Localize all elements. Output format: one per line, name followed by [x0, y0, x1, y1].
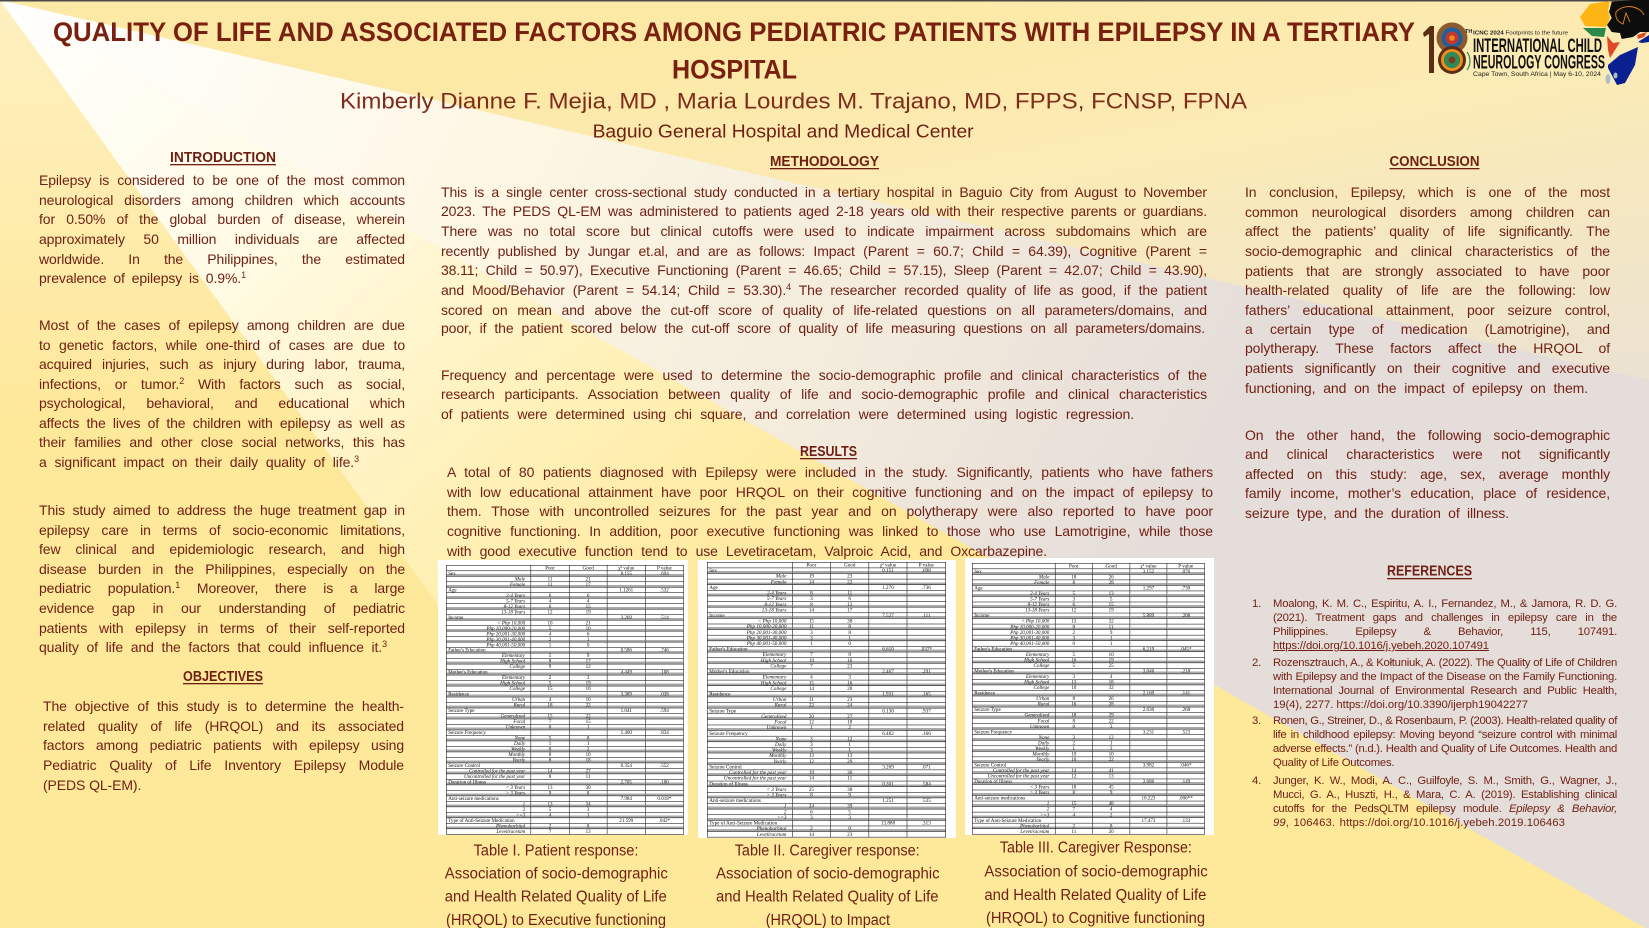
text: introduction paragraph 2: infections, or tumor.2 With factors such as social, [39, 376, 405, 392]
references list: Mucci, G. A., Huszti, H., & Mara, C. A. (2019). Establishing clinical [1273, 789, 1617, 801]
text: introduction paragraph 2: their families and other close social networks, this has [39, 434, 405, 450]
text: introduction paragraph 3: epilepsy care in terms of socio-economic limitations, [39, 522, 405, 538]
references list: https://doi.org/10.1016/j.yebeh.2020.107491 [1273, 640, 1489, 652]
references list [1252, 598, 1618, 829]
references list: 2. [1252, 657, 1261, 669]
heading: introduction: INTRODUCTION [170, 150, 276, 166]
text: introduction paragraph 1: for 0.50% of the global burden of disease, wherein [39, 211, 405, 227]
text: introduction paragraph 1: worldwide. In the Philippines, the estimated [39, 251, 405, 267]
text: methodology paragraph 1: and Mood/Behavior (Parent = 54.14; Child = 53.30).4 The researcher recorded quality of life as good, if the patient [441, 282, 1207, 298]
text: introduction paragraph 3: few clinical and epidemiologic research, and high [39, 541, 405, 557]
text: results: cognitive functioning. In addition, poor executive functioning was linked to those who use Lamotrigine, while those [447, 523, 1213, 539]
text: conclusion paragraph 1: socio-demographic and clinical characteristics of the [1245, 243, 1610, 259]
text: methodology paragraph 1: There was no total score but clinical cutoffs were used to indicate impairment across subdomains which are [441, 223, 1207, 239]
text: introduction paragraph 3 [39, 502, 405, 655]
text: conclusion paragraph 1: common neurological disorders among children can [1245, 204, 1610, 220]
references list: Quality of Life Outcomes. [1273, 757, 1394, 769]
text: conclusion paragraph 1 [1245, 184, 1610, 396]
text: methodology paragraph 1: 38.11; Child = 50.97), Executive Functioning (Parent = 46.65; Child = 57.15), Sleep (Parent = 42.07; Child = 43.90), [441, 262, 1207, 278]
text: methodology paragraph 2: research participants. Association between quality of life and socio-demographic profile and clinical characteristics [441, 386, 1207, 402]
text: conclusion paragraph 1: functioning, and on the impact of epilepsy on them. [1245, 380, 1588, 396]
text: methodology paragraph 1: recently published by Jungar et.al, and are as follows: Impact (Parent = 60.7; Child = 64.39), Cognitive (Parent = [441, 243, 1207, 259]
references list: Junger, K. W., Modi, A. C., Guilfoyle, S. M., Smith, G., Wagner, J., [1273, 775, 1617, 787]
text: introduction paragraph 2: psychological, behavioral, and educational which [39, 395, 405, 411]
caption: table I: Table I. Patient response: [474, 843, 638, 860]
text: conclusion paragraph 2: and clinical characteristics were not significantly [1245, 446, 1610, 462]
logo: International Child Neurology Congress [1423, 0, 1649, 85]
text: results: A total of 80 patients diagnosed with Epilepsy were included in the study. Significantly, patients who have fathers [447, 464, 1213, 480]
text: conclusion paragraph 1: patients that are strongly associated to have poor [1245, 263, 1610, 279]
text: introduction paragraph 1: approximately 50 million individuals are affected [39, 231, 405, 247]
text: methodology paragraph 1: This is a single center cross-sectional study conducted in a tertiary hospital in Baguio City from August to November [441, 184, 1207, 200]
references list: 19(4), 2277. https://doi.org/10.3390/ijerph19042277 [1273, 699, 1528, 711]
logo: International Child Neurology Congress: Cape Town, South Africa | May 6-10, 2024 [1473, 72, 1602, 78]
text: introduction paragraph 1: neurological disorders among children which accounts [39, 192, 405, 208]
text: objectives [43, 698, 404, 793]
text: introduction paragraph 3: This study aimed to address the huge treatment gap in [39, 502, 405, 518]
text: introduction paragraph 3: pediatric population.1 Moreover, there is a large [39, 580, 405, 596]
text: results: with good executive function tend to use Levetiracetam, Valproic Acid, and Oxcarbazepine. [447, 543, 1047, 559]
text: conclusion paragraph 2: On the other hand, the following socio-demographic [1245, 427, 1610, 443]
text: introduction paragraph 3: evidence gap in our understanding of pediatric [39, 600, 405, 616]
references list: Rozensztrauch, A., & Kołtuniuk, A. (2022). The Quality of Life of Children [1273, 657, 1617, 669]
references list: 1. [1252, 598, 1261, 610]
references list: Ronen, G., Streiner, D., & Rosenbaum, P. (2003). Health-related quality of [1273, 715, 1617, 727]
authors: Kimberly Dianne F. Mejia, MD , Maria Lourdes M. Trajano, MD, FPPS, FCNSP, FPNA [340, 89, 1247, 114]
text: introduction paragraph 2: a significant impact on their daily quality of life.3 [39, 454, 359, 470]
caption: table II [716, 843, 940, 928]
caption: table I: Association of socio-demographic [445, 866, 668, 883]
caption: table III: and Health Related Quality of Life [984, 887, 1206, 904]
logo: International Child Neurology Congress: ICNC 2024 Footprints to the future [1473, 30, 1568, 36]
references list: Moalong, K. M. C., Espiritu, A. I., Fernandez, M., & Jamora, R. D. G. [1273, 598, 1617, 610]
caption: table III: (HRQOL) to Cognitive functioning [986, 910, 1205, 927]
heading: conclusion: CONCLUSION [1390, 154, 1480, 170]
text: conclusion paragraph 1: fathers’ educational attainment, poor seizure control, [1245, 302, 1610, 318]
text: introduction paragraph 3: patients with epilepsy in terms of their self-reported [39, 620, 405, 636]
caption: table II: Table II. Caregiver response: [735, 843, 920, 860]
text: methodology paragraph 1: poor, if the patient scored below the cut-off score of quality of life measuring questions on all parameters/domains. [441, 320, 1205, 336]
caption: table III: Association of socio-demographic [984, 864, 1208, 881]
text: introduction paragraph 2: Most of the cases of epilepsy among children are due [39, 317, 405, 333]
references list: 3. [1252, 715, 1261, 727]
text: introduction paragraph 1: Epilepsy is considered to be one of the most common [39, 172, 405, 188]
text: conclusion paragraph 2: family income, mother’s education, place of residence, [1245, 485, 1610, 501]
logo: International Child Neurology Congress: TH [1465, 29, 1472, 35]
text: methodology paragraph 2: Frequency and percentage were used to determine the socio-demographic profile and clinical characteristics of the [441, 367, 1207, 383]
caption: table I [444, 843, 668, 928]
text: conclusion paragraph 1: In conclusion, Epilepsy, which is one of the most [1245, 184, 1610, 200]
text: conclusion paragraph 2: seizure type, and the duration of illness. [1245, 505, 1509, 521]
text: methodology paragraph 1: 2023. The PEDS QL-EM was administered to patients aged 2-18 years old with their respective parents or guardians. [441, 203, 1207, 219]
caption: table I: and Health Related Quality of Life [445, 889, 667, 906]
text: objectives: (PEDS QL-EM). [43, 777, 141, 793]
text: introduction paragraph 2: affects the lives of the children with epilepsy as well as [39, 415, 405, 431]
text: results: them. Those with uncontrolled seizures for the past year and on polytherapy were also reported to have poor [447, 503, 1213, 519]
references list: adverse effects.” (n.d.). Health and Quality of Life Outcomes. Health and [1273, 743, 1617, 755]
caption: table II: and Health Related Quality of Life [716, 889, 938, 906]
text: introduction paragraph 1: prevalence of epilepsy is 0.9%.1 [39, 270, 246, 286]
text: conclusion paragraph 1: a certain type of medication (Lamotrigine), and [1245, 321, 1610, 337]
text: methodology paragraph 1 [441, 184, 1208, 336]
references list: (2021). Treatment gaps and challenges in epilepsy care in the [1273, 612, 1617, 624]
text: introduction paragraph 1 [39, 172, 405, 286]
text: conclusion paragraph 1: polytherapy. These factors affect the HRQOL of [1245, 340, 1610, 356]
text: conclusion paragraph 1: health-related quality of life are the following: low [1245, 282, 1610, 298]
text: introduction paragraph 3: disease burden in the Philippines, especially on the [39, 561, 405, 577]
heading: methodology: METHODOLOGY [770, 154, 879, 170]
title: HOSPITAL [672, 55, 797, 85]
caption: table II: Association of socio-demographic [716, 866, 940, 883]
references list: with Epilepsy and the Impact of the Disease on the Family Functioning. [1273, 671, 1617, 683]
text: conclusion paragraph 1: patients significantly on their cognitive and executive [1245, 360, 1610, 376]
caption: table III [984, 840, 1208, 927]
affiliation: Baguio General Hospital and Medical Center [593, 120, 974, 142]
references list: International Journal of Environmental Research and Public Health, [1273, 685, 1617, 697]
table I: patient response [438, 560, 688, 835]
references list: life in childhood epilepsy: Moving beyond “seizure control with minimal [1273, 729, 1617, 741]
references list: Philippines. Epilepsy & Behavior, 115, 107491. [1273, 626, 1617, 638]
text: methodology paragraph 2 [441, 367, 1207, 422]
text: introduction paragraph 3: quality of life and the factors that could influence it.3 [39, 639, 387, 655]
text: objectives: The objective of this study is to determine the health- [43, 698, 404, 714]
text: results [447, 464, 1213, 559]
text: conclusion paragraph 2 [1245, 427, 1610, 521]
references list: 4. [1252, 775, 1261, 787]
text: objectives: related quality of life (HRQOL) and its associated [43, 718, 404, 734]
table III: caregiver response [965, 558, 1214, 835]
text: methodology paragraph 2: of patients were determined using chi square, and correlation were determined using logistic regression. [441, 406, 1134, 422]
text: introduction paragraph 2: to genetic factors, while one-third of cases are due to [39, 337, 405, 353]
text: objectives: factors among pediatric patients with epilepsy using [43, 737, 404, 753]
text: conclusion paragraph 2: affected on this study: age, sex, average monthly [1245, 466, 1610, 482]
title: QUALITY OF LIFE AND ASSOCIATED FACTORS AMONG PEDIATRIC PATIENTS WITH EPILEPSY IN A TERTIARY [53, 17, 1415, 47]
references list: cutoffs for the PedsQLTM epilepsy module. Epilepsy & Behavior, [1273, 803, 1617, 815]
caption: table III: Table III. Caregiver Response: [1000, 840, 1192, 857]
references list: 99, 106463. https://doi.org/10.1016/j.yebeh.2019.106463 [1273, 817, 1565, 829]
text: introduction paragraph 2: acquired injuries, such as injury during labor, trauma, [39, 356, 405, 372]
table II: caregiver response [698, 560, 956, 838]
text: objectives: Pediatric Quality of Life Inventory Epilepsy Module [43, 757, 404, 773]
text: methodology paragraph 1: scored on mean and above the cut-off score of quality of life-related questions on all parameters/domains, and [441, 302, 1207, 318]
text: conclusion paragraph 1: affect the patients’ quality of life significantly. The [1245, 223, 1610, 239]
text: results: with low educational attainment have poor HRQOL on their cognitive functioning and on the impact of epilepsy to [447, 484, 1213, 500]
text: introduction paragraph 2 [39, 317, 405, 470]
title [53, 17, 1415, 85]
